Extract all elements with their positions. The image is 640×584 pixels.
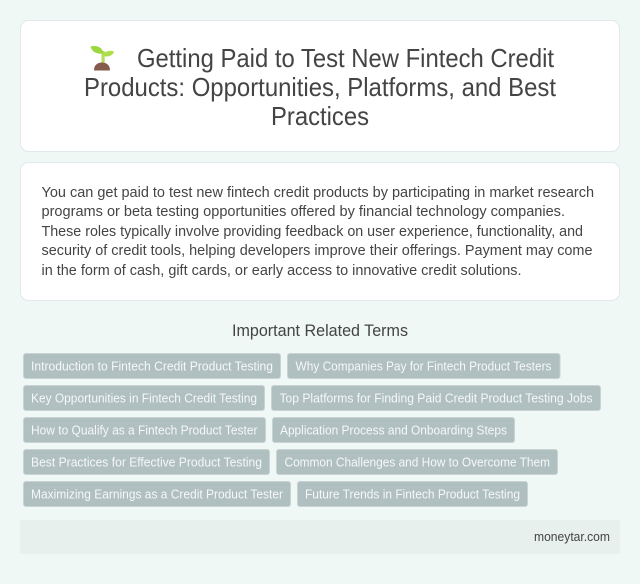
chip	[288, 354, 560, 378]
chip	[24, 418, 266, 442]
footer source text: moneytar.com	[534, 529, 610, 544]
summary paragraph: These roles typically involve providing feedback on user experience, functionality, and	[42, 223, 583, 240]
chip	[298, 482, 528, 506]
chip: Why Companies Pay for Fintech Product Testers	[296, 358, 552, 374]
chip	[24, 482, 290, 506]
chip: How to Qualify as a Fintech Product Tester	[31, 422, 258, 438]
summary paragraph: security of credit tools, helping developers improve their offerings. Payment may come	[42, 242, 592, 259]
chip: Key Opportunities in Fintech Credit Testing	[31, 390, 257, 406]
title: Products: Opportunities, Platforms, and Best	[84, 72, 557, 102]
panel: title card	[20, 20, 620, 152]
title: Getting Paid to Test New Fintech Credit	[137, 43, 555, 73]
summary paragraph: You can get paid to test new fintech credit products by participating in market research	[42, 184, 594, 201]
chip	[24, 354, 280, 378]
chip: Maximizing Earnings as a Credit Product Tester	[31, 486, 284, 502]
summary paragraph: in the form of cash, gift cards, or early access to innovative credit solutions.	[42, 262, 522, 279]
chip: Introduction to Fintech Credit Product Testing	[31, 358, 273, 374]
chip: Top Platforms for Finding Paid Credit Product Testing Jobs	[280, 390, 593, 406]
chip: Best Practices for Effective Product Testing	[31, 454, 262, 470]
chip: Future Trends in Fintech Product Testing	[305, 486, 520, 502]
heading: important related terms: Important Related Terms	[232, 322, 408, 340]
panel: summary text	[20, 162, 620, 300]
chip	[24, 386, 264, 410]
chip	[272, 386, 600, 410]
chip: Common Challenges and How to Overcome Them	[284, 454, 550, 470]
icon: seedling	[90, 46, 114, 70]
chip	[276, 450, 558, 474]
panel: related term chips	[24, 354, 600, 506]
summary paragraph: programs or beta testing opportunities offered by financial technology companies.	[42, 203, 565, 220]
chip: Application Process and Onboarding Steps	[280, 422, 507, 438]
footer bar	[20, 520, 620, 554]
chip	[24, 450, 270, 474]
chip	[272, 418, 514, 442]
title: Practices	[271, 101, 369, 131]
title	[84, 43, 557, 131]
summary paragraph	[42, 184, 594, 279]
